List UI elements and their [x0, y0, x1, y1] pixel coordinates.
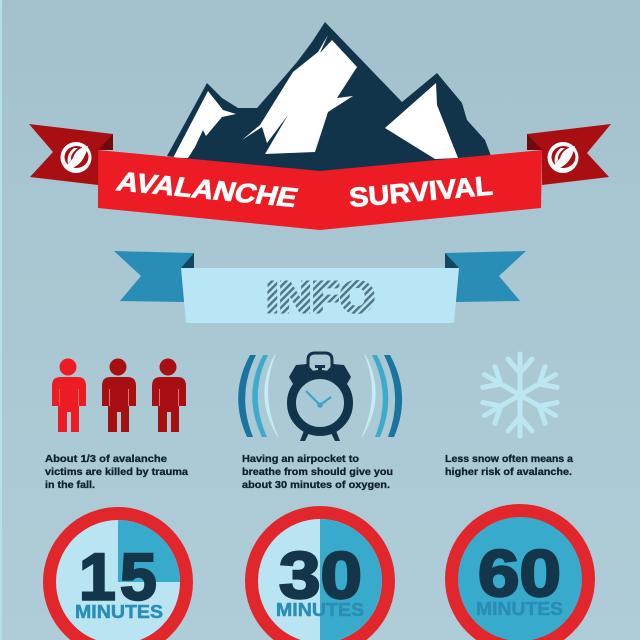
text block: trauma fact — [45, 454, 188, 491]
number: 15: 15 — [79, 540, 157, 614]
text block: airpocket fact: Having an airpocket to — [242, 454, 359, 465]
timer: 60 minutes — [452, 510, 588, 640]
icon: left ribbon logo — [60, 142, 92, 173]
title word: survival: SURVIVAL — [348, 171, 494, 213]
number: 30: 30 — [279, 538, 362, 612]
icon: alarm clock — [289, 353, 351, 441]
text block: trauma fact: in the fall. — [45, 480, 95, 491]
icon: person dark 2 — [152, 358, 186, 432]
timer: 15 minutes — [50, 514, 186, 640]
left ribbon tail — [29, 124, 113, 185]
right ribbon tail — [527, 124, 611, 185]
title word: avalanche: AVALANCHE — [113, 166, 302, 213]
text block: snow fact: higher risk of avalanche. — [445, 467, 572, 478]
text block: airpocket fact: breathe from should give you — [242, 467, 393, 478]
text block: snow fact: Less snow often means a — [445, 454, 573, 465]
label: minutes: MINUTES — [276, 600, 364, 620]
timer: 30 minutes — [252, 512, 388, 640]
info ribbon left tail — [114, 251, 194, 302]
icon: snowflake — [478, 354, 562, 436]
icon: sound waves left — [238, 355, 278, 437]
text block: trauma fact: victims are killed by trauma — [45, 467, 188, 478]
text block: airpocket fact: about 30 minutes of oxygen. — [242, 480, 390, 491]
icon: person dark 1 — [102, 358, 136, 432]
icon: right ribbon logo — [548, 142, 578, 173]
icon: sound waves right — [362, 355, 402, 437]
text block: airpocket fact — [242, 454, 393, 491]
title banner — [98, 150, 542, 230]
text block: trauma fact: About 1/3 of avalanche — [45, 454, 167, 465]
heading: info: INFO — [266, 273, 375, 322]
number: 60: 60 — [478, 536, 561, 610]
text block: snow fact — [445, 454, 573, 478]
label: minutes: MINUTES — [476, 599, 563, 619]
icon: mountain — [167, 22, 491, 180]
info ribbon right tail — [445, 251, 526, 302]
label: minutes: MINUTES — [75, 602, 163, 622]
info banner — [181, 268, 459, 323]
icon: person red — [52, 358, 86, 432]
